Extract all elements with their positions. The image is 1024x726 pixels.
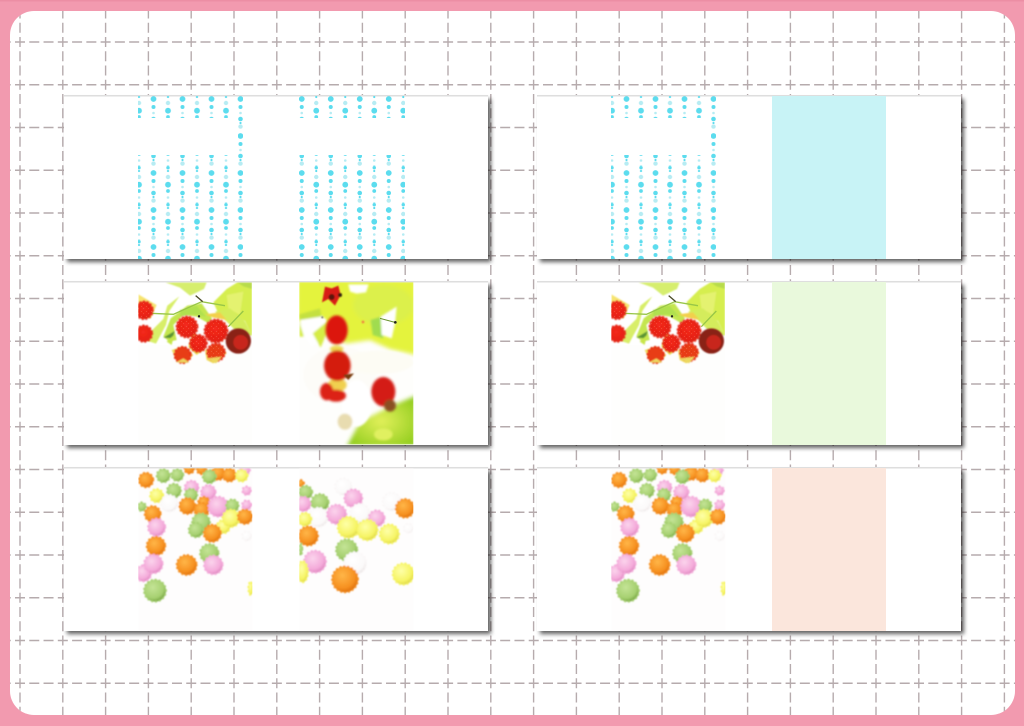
- photo: berries close-up: [297, 280, 416, 447]
- panel: top left card: [64, 95, 488, 259]
- panel: bottom right card: [537, 464, 961, 631]
- top frame edge: [0, 0, 1024, 2]
- panel: middle left card: [64, 280, 488, 447]
- panel: middle right card: [537, 281, 961, 445]
- panel: bottom left card: [64, 464, 488, 631]
- photo: candies close-up: [296, 468, 414, 630]
- panel: top right card: [537, 95, 961, 259]
